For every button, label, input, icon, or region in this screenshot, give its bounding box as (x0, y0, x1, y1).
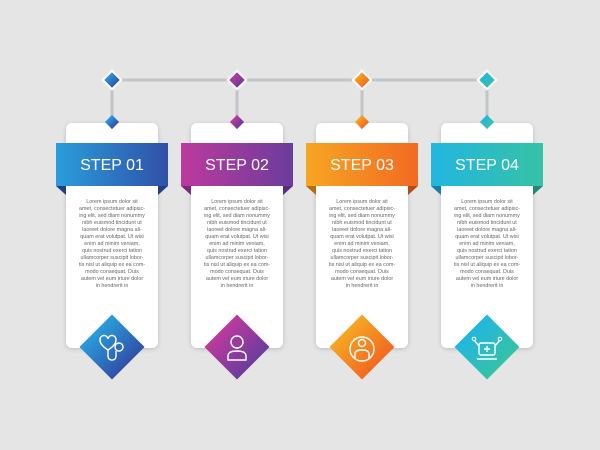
text 3: in hendrerit in (346, 283, 378, 289)
text 1: nibh euismod tincidunt ut (82, 220, 142, 226)
card 2 (191, 123, 283, 348)
text 1: modo consequat. Duis (85, 269, 139, 275)
text 4: autem vel eum iriure dolor (456, 276, 518, 282)
text 4: ullamcorper suscipit lobor- (456, 255, 519, 261)
top diamond 1 (103, 71, 121, 89)
top diamond 2 (228, 71, 246, 89)
text 1: ullamcorper suscipit lobor- (81, 255, 144, 261)
text 2: Lorem ipsum dolor sit (211, 199, 263, 205)
text 1: enim ad minim veniam, (84, 241, 140, 247)
text 4: ing elit, sed diam nonummy (454, 213, 520, 219)
text 4: amet, consectetuer adipisc- (454, 206, 520, 212)
text 4: quam erat volutpat. Ut wisi (455, 234, 519, 240)
card 1 (66, 123, 158, 348)
card 4 (441, 123, 533, 348)
icon diamond 4: medical kit (454, 314, 520, 380)
text 4: laoreet dolore magna ali- (457, 227, 517, 233)
text 1: quam erat volutpat. Ut wisi (80, 234, 144, 240)
text 1: in hendrerit in (96, 283, 128, 289)
text 3: quis nostrud exerci tation (332, 248, 392, 254)
text 3: ullamcorper suscipit lobor- (331, 255, 394, 261)
text 3: enim ad minim veniam, (334, 241, 390, 247)
text 1: amet, consectetuer adipisc- (79, 206, 145, 212)
text 3: tis nisl ut aliquip ex ea com- (329, 262, 395, 268)
step 4 (431, 71, 543, 380)
text 3: ing elit, sed diam nonummy (329, 213, 395, 219)
banner 4 (431, 143, 543, 195)
banner 2: STEP 02 (205, 157, 269, 174)
text 4: tis nisl ut aliquip ex ea com- (454, 262, 520, 268)
icon diamond 2: person (204, 314, 270, 380)
text 2: modo consequat. Duis (210, 269, 264, 275)
banner 1: STEP 01 (80, 157, 144, 174)
text 1: Lorem ipsum dolor sit (86, 199, 138, 205)
text 2: ing elit, sed diam nonummy (204, 213, 270, 219)
text 2: quam erat volutpat. Ut wisi (205, 234, 269, 240)
step 1 (56, 71, 168, 380)
top diamond 3 (353, 71, 371, 89)
text 1: ing elit, sed diam nonummy (79, 213, 145, 219)
text 2: laoreet dolore magna ali- (207, 227, 267, 233)
connector line (112, 80, 487, 122)
banner 3: STEP 03 (330, 157, 394, 174)
text 4: in hendrerit in (471, 283, 503, 289)
icon diamond 3: person in circle (329, 314, 395, 380)
text 3: nibh euismod tincidunt ut (332, 220, 392, 226)
text 2: nibh euismod tincidunt ut (207, 220, 267, 226)
text 3: laoreet dolore magna ali- (332, 227, 392, 233)
text 2: quis nostrud exerci tation (207, 248, 267, 254)
banner 3 (306, 143, 418, 195)
text 1: tis nisl ut aliquip ex ea com- (79, 262, 145, 268)
banner 1 (56, 143, 168, 195)
text 1: laoreet dolore magna ali- (82, 227, 142, 233)
text 4: modo consequat. Duis (460, 269, 514, 275)
text 2: enim ad minim veniam, (209, 241, 265, 247)
step 2 (181, 71, 293, 380)
text 2: amet, consectetuer adipisc- (204, 206, 270, 212)
text 4: quis nostrud exerci tation (457, 248, 517, 254)
banner 2 (181, 143, 293, 195)
banner 4: STEP 04 (455, 157, 519, 174)
card 3 (316, 123, 408, 348)
text 2: autem vel eum iriure dolor (206, 276, 268, 282)
text 2: in hendrerit in (221, 283, 253, 289)
text 2: tis nisl ut aliquip ex ea com- (204, 262, 270, 268)
step 3 (306, 71, 418, 380)
text 3: Lorem ipsum dolor sit (336, 199, 388, 205)
text 4: enim ad minim veniam, (459, 241, 515, 247)
text 4: nibh euismod tincidunt ut (457, 220, 517, 226)
text 4: Lorem ipsum dolor sit (461, 199, 513, 205)
text 1: quis nostrud exerci tation (82, 248, 142, 254)
text 3: amet, consectetuer adipisc- (329, 206, 395, 212)
icon diamond 1: stethoscope (79, 314, 145, 380)
text 2: ullamcorper suscipit lobor- (206, 255, 269, 261)
text 3: modo consequat. Duis (335, 269, 389, 275)
top diamond 4 (478, 71, 496, 89)
text 1: autem vel eum iriure dolor (81, 276, 143, 282)
text 3: autem vel eum iriure dolor (331, 276, 393, 282)
text 3: quam erat volutpat. Ut wisi (330, 234, 394, 240)
